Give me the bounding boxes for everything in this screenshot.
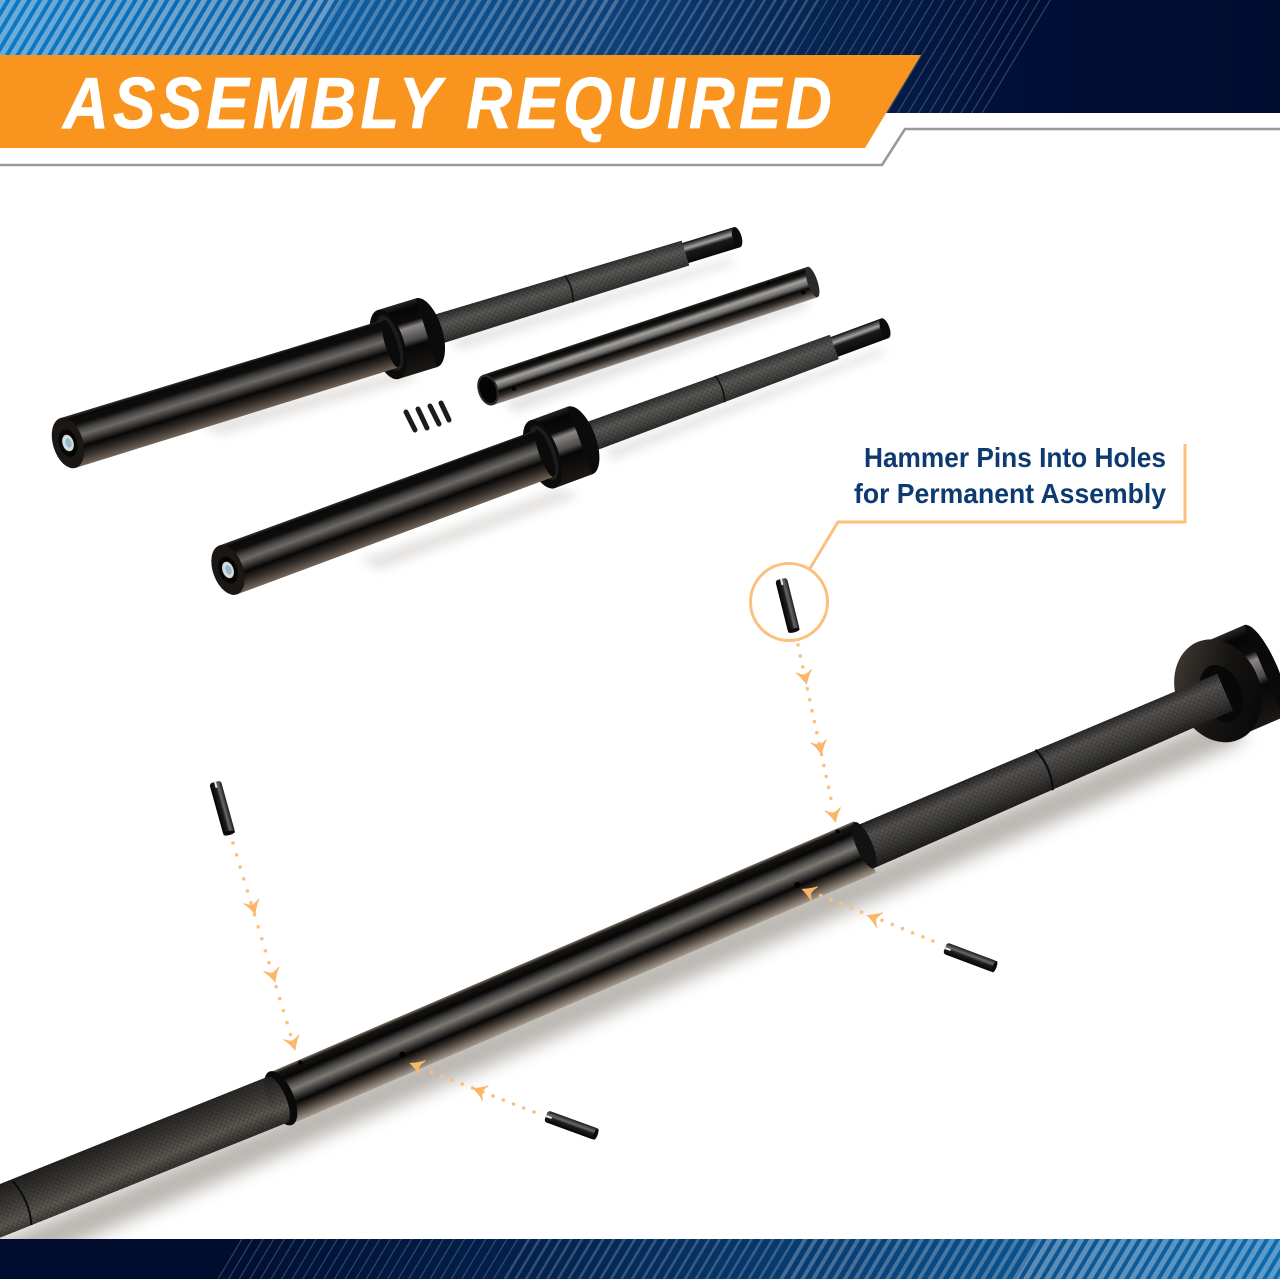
callout leader line bbox=[809, 444, 1185, 570]
arrow: from circled pin to top hole bbox=[796, 645, 843, 824]
icon: pin in circle bbox=[750, 564, 828, 640]
pin bottom bbox=[543, 1110, 600, 1140]
header stripe band bbox=[0, 0, 1280, 113]
center sleeve bbox=[270, 818, 883, 1124]
callout text: Hammer Pins Into Holes bbox=[864, 442, 1166, 473]
left knurled grip bbox=[0, 1063, 304, 1253]
bar shadow bbox=[0, 711, 1244, 1279]
title: ASSEMBLY REQUIRED bbox=[61, 64, 836, 144]
lower left barbell sleeve part bbox=[201, 293, 902, 609]
upper left barbell sleeve part bbox=[43, 201, 752, 482]
four roll pins bbox=[406, 403, 449, 430]
title banner bbox=[0, 55, 921, 148]
pin top left bbox=[209, 779, 235, 837]
right knurled grip bbox=[856, 671, 1234, 868]
callout: hammer pins bbox=[809, 442, 1185, 570]
center connector tube bbox=[473, 265, 822, 412]
arrow: from right pin to side hole bbox=[800, 882, 933, 941]
pin right bbox=[942, 942, 999, 973]
collar bbox=[1158, 617, 1280, 756]
assembled barbell bbox=[0, 617, 1280, 1279]
white outline rule under header bbox=[0, 129, 1280, 165]
arrow: from left pin to top hole bbox=[233, 843, 303, 1052]
arrow: from bottom pin to side hole bbox=[408, 1056, 534, 1112]
footer stripe band bbox=[0, 1239, 1280, 1279]
callout text bbox=[854, 442, 1166, 509]
callout text: for Permanent Assembly bbox=[854, 478, 1166, 509]
